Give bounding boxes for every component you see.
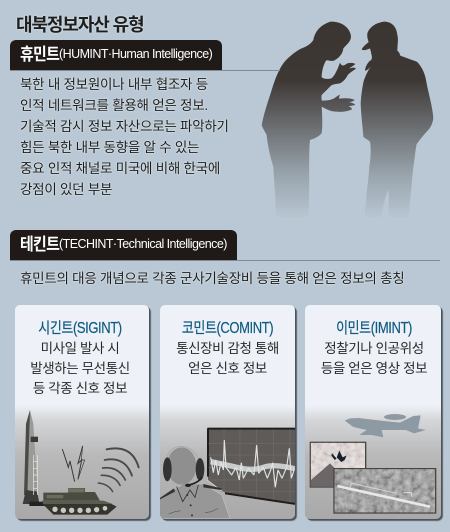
text: IMINT description — [321, 341, 427, 376]
heading: HUMINT tab — [10, 40, 222, 70]
panel: SIGINT — [15, 305, 149, 519]
text: COMINT description: 얻은 신호 정보 — [188, 361, 267, 376]
text block: TECHINT description: 휴민트의 대응 개념으로 각종 군사기술장비 등을 통해 얻은 정보의 총칭 — [20, 271, 404, 286]
heading: COMINT: 코민트(COMINT) — [182, 320, 273, 337]
text block: HUMINT description: 인적 네트워크를 활용해 얻은 정보. — [20, 98, 208, 113]
text block: HUMINT description: 중요 인적 채널로 미국에 비해 한국에 — [20, 161, 220, 176]
text: IMINT description: 정찰기나 인공위성 — [324, 341, 424, 356]
text: SIGINT description — [30, 341, 130, 396]
panel: COMINT — [160, 305, 295, 519]
text: SIGINT description: 미사일 발사 시 — [41, 341, 119, 356]
text: IMINT description: 등을 얻은 영상 정보 — [321, 361, 427, 376]
text block: HUMINT description — [20, 76, 229, 197]
heading: TECHINT tab: (TECHINT·Technical Intelligence) — [59, 237, 227, 251]
heading: HUMINT tab: 휴민트 — [20, 45, 59, 64]
icon: missile launcher, lightning and signal waves — [22, 410, 140, 515]
text block: HUMINT description: 힘든 북한 내부 동향을 알 수 있는 — [20, 140, 199, 155]
text: COMINT description — [176, 341, 279, 376]
heading: TECHINT tab: 테킨트 — [20, 235, 59, 254]
text: SIGINT description: 발생하는 무선통신 — [30, 361, 130, 376]
text block: HUMINT description: 북한 내 정보원이나 내부 협조자 등 — [20, 77, 208, 92]
panel: IMINT — [305, 305, 441, 519]
text: COMINT description: 통신장비 감청 통해 — [176, 341, 279, 356]
text: SIGINT description: 등 각종 신호 정보 — [33, 381, 127, 396]
icon: headset operator and signal monitor — [160, 428, 295, 519]
heading: IMINT: 이민트(IMINT) — [336, 320, 412, 337]
text block: HUMINT description: 강점이 있던 부분 — [20, 182, 112, 197]
heading: TECHINT tab — [10, 230, 237, 260]
rule: techint heading line — [10, 260, 440, 261]
rule: humint heading line — [10, 70, 280, 71]
icon: reconnaissance plane and satellite photos — [310, 414, 436, 514]
text block: HUMINT description: 기술적 감시 정보 자산으로는 파악하기 — [20, 119, 229, 134]
title: 대북정보자산 유형 — [16, 15, 144, 35]
heading: SIGINT: 시긴트(SIGINT) — [38, 320, 122, 337]
heading: HUMINT tab: (HUMINT·Human Intelligence) — [59, 47, 212, 61]
